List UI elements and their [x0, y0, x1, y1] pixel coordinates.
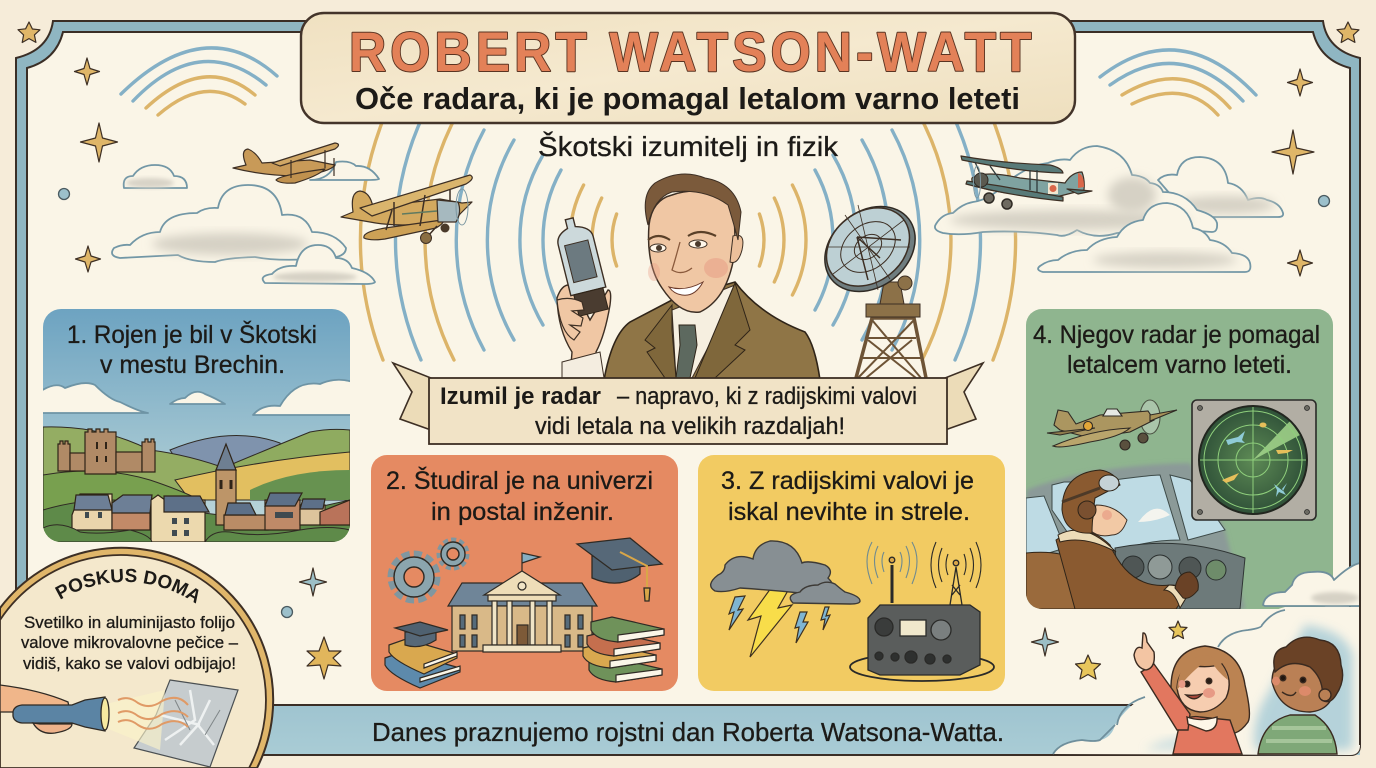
- stars lower middle: [282, 568, 341, 679]
- panel 1: Brechin, Scotland: [35, 309, 360, 542]
- panel 4: pilot and radar: [1026, 309, 1333, 609]
- castle: [58, 429, 155, 474]
- sparkle stars right and dot: [1272, 69, 1330, 276]
- experiment text: Svetilko in aluminijasto folijo: [24, 614, 235, 632]
- portrait: Robert Watson-Watt with vacuum tube: [553, 174, 820, 380]
- church: [216, 444, 236, 525]
- books right: [583, 617, 664, 682]
- radar waves around the portrait: [360, 120, 1016, 360]
- vacuum tube: [553, 214, 611, 317]
- child: boy: [1258, 637, 1343, 754]
- cockpit scene: [1026, 463, 1245, 609]
- experiment text: [21, 614, 239, 673]
- radio waves: left rainbow arcs: [121, 48, 277, 115]
- light beam: [106, 690, 165, 750]
- ribbon text: vidi letala na velikih razdaljah!: [535, 413, 845, 440]
- radar screen: [1192, 400, 1316, 520]
- biplane large: [341, 175, 472, 244]
- radar dish on lattice tower: [808, 189, 932, 378]
- lower right cloud: [1053, 558, 1360, 755]
- lower right stars: [1032, 621, 1187, 679]
- ribbon banner: [393, 363, 983, 444]
- ribbon text: – napravo, ki z radijskimi valovi: [617, 383, 917, 410]
- hand holding tube: [557, 285, 611, 378]
- experiment circle: Poskus doma: [0, 546, 274, 768]
- curved heading: POSKUS DOMA: [54, 568, 198, 604]
- shirt and tie: [645, 283, 750, 378]
- clouds upper left: [112, 162, 379, 284]
- corner star top right: [1337, 22, 1359, 42]
- university building: [448, 553, 597, 652]
- panel 1 text: [67, 320, 317, 379]
- panel 2 text: 2. Študiral je na univerzi: [386, 466, 653, 495]
- clouds upper right: [935, 146, 1283, 272]
- panel 3 text: iskal nevihte in strele.: [728, 498, 970, 526]
- title text: ROBERT WATSON-WATT: [349, 21, 1032, 83]
- panel 3 text: [721, 467, 974, 526]
- plane in panel 4: [1047, 400, 1177, 450]
- experiment text: vidiš, kako se valovi odbijajo!: [23, 655, 236, 673]
- flashlight and hand: [0, 685, 109, 733]
- books left: [385, 622, 460, 688]
- lightning bolts: [729, 587, 830, 657]
- bottom bar text: Danes praznujemo rojstni dan Roberta Watsona-Watta.: [372, 717, 1004, 747]
- houses: [72, 493, 350, 542]
- shirt cuff and sleeve: [562, 352, 604, 378]
- panel 4 text: 4. Njegov radar je pomagal: [1033, 321, 1320, 349]
- radio waves: right rainbow arcs: [1100, 50, 1256, 115]
- title box: [301, 13, 1075, 123]
- sparkle stars left and dot: [58, 58, 118, 272]
- bottom bar: [230, 610, 1360, 755]
- suit jacket: [604, 282, 820, 380]
- panel 2 text: in postal inženir.: [431, 498, 614, 526]
- panel 2: university: [371, 455, 678, 691]
- experiment text: valove mikrovalovne pečice –: [21, 634, 239, 652]
- panel 4 text: [1033, 321, 1320, 379]
- biplane small: [233, 143, 338, 183]
- panel 1 text: 1. Rojen je bil v Škotski: [67, 320, 317, 349]
- biplane blue-green: [961, 156, 1092, 209]
- graduation cap large: [577, 538, 662, 601]
- heat waves: [118, 698, 188, 729]
- tagline: Škotski izumitelj in fizik: [538, 131, 839, 162]
- radio set: [850, 557, 994, 681]
- panel 3 text: 3. Z radijskimi valovi je: [721, 467, 974, 495]
- ribbon text: [440, 383, 917, 440]
- Brechin landscape: [35, 380, 360, 542]
- corner star top left: [18, 22, 40, 42]
- panel 2 text: [386, 466, 653, 526]
- panel 3: storms and radio: [698, 455, 1005, 691]
- head: [645, 174, 743, 312]
- radio wave marks: [867, 542, 981, 588]
- storm clouds: [711, 541, 860, 604]
- ribbon text: Izumil je radar: [440, 383, 601, 410]
- aluminium foil: [134, 680, 238, 767]
- subtitle: Oče radara, ki je pomagal letalom varno leteti: [355, 81, 1020, 116]
- gears: [391, 540, 467, 600]
- fingers: [557, 298, 584, 340]
- child: girl pointing up: [1134, 633, 1249, 754]
- panel 4 text: letalcem varno leteti.: [1067, 351, 1292, 379]
- panel 1 text: v mestu Brechin.: [100, 351, 285, 379]
